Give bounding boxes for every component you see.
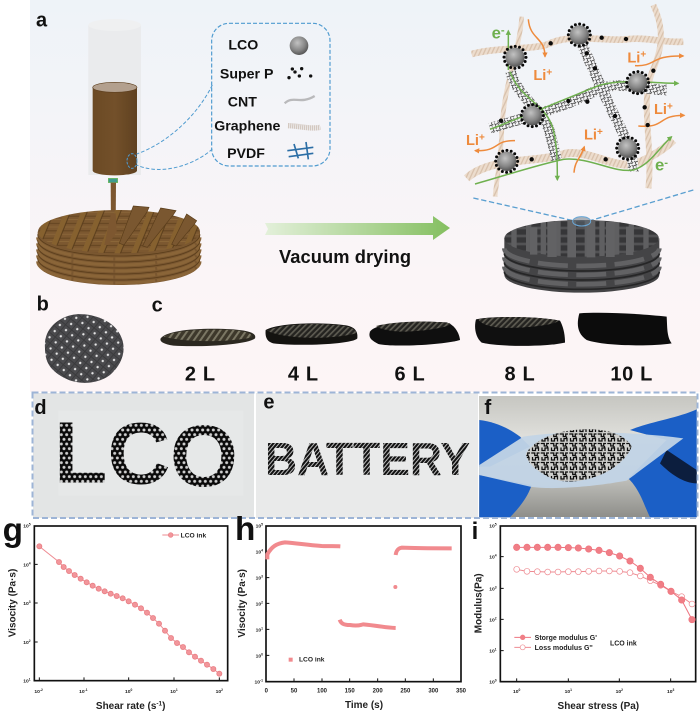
electron and lithium labels: + bbox=[597, 127, 603, 138]
brown printed scaffold bbox=[38, 206, 200, 285]
legend item: CNT bbox=[228, 94, 315, 110]
gloves bbox=[479, 409, 697, 517]
x axis tick labels: 350 bbox=[456, 688, 467, 694]
storage modulus curve bbox=[517, 547, 692, 620]
label 10 L: 10 L bbox=[610, 364, 653, 386]
legend item: CNT: CNT bbox=[228, 94, 257, 110]
y axis tick labels: 3 bbox=[261, 575, 263, 579]
y axis tick labels: 5 bbox=[29, 523, 31, 527]
legend: Storge modulus G' bbox=[535, 635, 597, 642]
y axis title: Modulus(Pa) bbox=[474, 573, 485, 633]
legend: LCO ink bbox=[299, 657, 325, 664]
y axis tick labels: 1 bbox=[261, 626, 263, 630]
x axis tick labels: 250 bbox=[400, 688, 411, 694]
panel letter g: g bbox=[3, 512, 23, 549]
electron and lithium labels: Li bbox=[466, 133, 479, 149]
carbon nanotubes bbox=[490, 43, 667, 172]
printed word LCO bbox=[54, 404, 238, 505]
panel c: thicker disks bbox=[369, 313, 672, 386]
panel letter e: e bbox=[263, 391, 274, 413]
panel letter i: i bbox=[472, 518, 478, 545]
x axis tick labels: 2 bbox=[621, 688, 623, 692]
x axis tick labels bbox=[34, 688, 223, 695]
y axis tick labels: 10 bbox=[489, 555, 495, 561]
chart annotation: LCO ink bbox=[610, 640, 637, 647]
y axis tick labels: 10 bbox=[256, 601, 261, 607]
photo: 4 L disk bbox=[266, 323, 357, 345]
legend item: Super P bbox=[220, 67, 311, 83]
panel a: electrode network illustration bbox=[466, 5, 693, 293]
printed word LCO: L bbox=[54, 404, 107, 502]
label 6 L: 6 L bbox=[395, 364, 425, 386]
legend item: LCO: LCO bbox=[228, 37, 258, 53]
y axis tick labels: 3 bbox=[29, 600, 31, 604]
y axis tick labels: 3 bbox=[495, 585, 497, 589]
x axis tick labels: 0 bbox=[519, 688, 521, 692]
y axis tick labels: 10 bbox=[489, 649, 495, 655]
legend item: LCO bbox=[228, 36, 308, 55]
legend: LCO ink bbox=[181, 532, 206, 539]
panel f: flexible print photo bbox=[479, 396, 697, 517]
legend: Loss modulus G'' bbox=[535, 645, 593, 652]
y axis tick labels: 10 bbox=[489, 680, 495, 686]
y axis tick labels: 10 bbox=[489, 586, 495, 592]
y axis tick labels: 10 bbox=[489, 524, 495, 530]
panel a: printing schematic bbox=[36, 10, 330, 285]
electron and lithium labels: e bbox=[655, 156, 664, 175]
electron and lithium labels: + bbox=[640, 50, 646, 61]
printed pattern bbox=[526, 429, 632, 482]
transparent film bbox=[479, 432, 683, 488]
loss modulus curve bbox=[517, 569, 692, 604]
panel g: viscosity vs shear rate chart bbox=[3, 512, 228, 712]
x axis tick labels: 300 bbox=[428, 688, 439, 694]
photo: top view disk bbox=[45, 314, 124, 383]
y axis title: Visocity (Pa·s) bbox=[7, 569, 18, 637]
x axis tick labels: 10 bbox=[616, 689, 621, 695]
panel letter a: a bbox=[36, 10, 48, 32]
x axis title: Time (s) bbox=[345, 700, 383, 711]
LCO particles bbox=[496, 24, 653, 172]
electron and lithium labels: + bbox=[546, 67, 552, 78]
panel letter f: f bbox=[484, 396, 491, 419]
x axis tick labels: 10 bbox=[513, 689, 519, 695]
panel letter d: d bbox=[34, 397, 47, 419]
y axis tick labels: 0 bbox=[495, 679, 497, 683]
x axis tick labels: 10 bbox=[34, 689, 40, 695]
x axis tick labels: 2 bbox=[221, 688, 223, 692]
zoom callout lines bbox=[473, 190, 693, 221]
legend item: PVDF bbox=[227, 142, 313, 162]
panel letter c: c bbox=[152, 295, 163, 317]
x axis tick labels: 10 bbox=[170, 689, 176, 695]
x axis tick labels: 150 bbox=[345, 688, 355, 694]
printed word BATTERY: BATTERY bbox=[265, 433, 470, 485]
y axis tick labels: 10 bbox=[23, 562, 29, 568]
panel letter h: h bbox=[235, 511, 255, 548]
printed word LCO: C bbox=[107, 405, 170, 503]
photo: 10 L disk bbox=[578, 313, 672, 345]
x axis tick labels: 200 bbox=[373, 688, 383, 694]
x axis tick labels: 10 bbox=[79, 689, 85, 695]
y axis tick labels: 1 bbox=[495, 648, 497, 652]
x axis tick labels bbox=[265, 688, 467, 694]
electron and lithium labels: - bbox=[501, 25, 505, 37]
x axis tick labels: 0 bbox=[265, 688, 269, 694]
y axis tick labels: 10 bbox=[256, 524, 261, 530]
y axis tick labels: 10 bbox=[256, 576, 261, 582]
electron and lithium labels: + bbox=[667, 101, 673, 112]
axes frame bbox=[34, 526, 228, 681]
x axis tick labels: 10 bbox=[565, 689, 570, 695]
legend item: Graphene: Graphene bbox=[214, 119, 280, 135]
label 2 L: 2 L bbox=[185, 364, 216, 386]
panels b and c: printed disks bbox=[37, 294, 357, 386]
x axis tick labels: 100 bbox=[317, 688, 328, 694]
electron and lithium labels: Li bbox=[533, 68, 546, 84]
x axis title: ) bbox=[162, 701, 165, 712]
y axis tick labels: 4 bbox=[495, 554, 497, 558]
axes frame bbox=[266, 526, 461, 682]
panel i: modulus vs shear stress chart bbox=[472, 518, 696, 712]
electron and lithium labels: e bbox=[492, 23, 501, 42]
printing syringe bbox=[88, 19, 141, 228]
callout: ink components legend bbox=[127, 23, 330, 169]
background: upper schematic area bbox=[30, 0, 700, 392]
x axis tick labels: 10 bbox=[216, 689, 221, 695]
x axis tick labels: 1 bbox=[176, 688, 178, 692]
y axis tick labels bbox=[23, 523, 31, 685]
x axis tick labels: 3 bbox=[673, 688, 675, 692]
photo: 6 L disk bbox=[369, 321, 460, 346]
electron and lithium labels: Li bbox=[627, 50, 640, 66]
y axis tick labels bbox=[489, 523, 497, 686]
electron and lithium labels: + bbox=[479, 132, 485, 143]
legend item: Graphene bbox=[214, 119, 320, 135]
legend item: PVDF: PVDF bbox=[227, 146, 265, 162]
x axis tick labels: 10 bbox=[125, 689, 131, 695]
y axis tick labels: 10 bbox=[256, 653, 261, 659]
y axis tick labels: 2 bbox=[29, 639, 31, 643]
electron and lithium labels: Li bbox=[584, 128, 597, 144]
electron and lithium labels: Li bbox=[654, 102, 667, 118]
x axis tick labels: -1 bbox=[85, 688, 88, 692]
electron and lithium labels bbox=[466, 23, 673, 175]
vacuum drying arrow bbox=[265, 216, 450, 267]
x axis tick labels: 0 bbox=[131, 688, 133, 692]
y axis tick labels: 4 bbox=[261, 549, 263, 553]
y axis tick labels: 10 bbox=[256, 550, 261, 556]
photo: 2 L disk bbox=[160, 329, 255, 346]
orange lithium-ion arrows bbox=[475, 19, 684, 173]
legend item: Super P: Super P bbox=[220, 67, 273, 83]
y axis tick labels: 10 bbox=[23, 640, 29, 646]
x axis title: Shear stress (Pa) bbox=[558, 701, 639, 712]
y axis tick labels: 10 bbox=[23, 601, 29, 607]
y axis tick labels bbox=[254, 523, 263, 686]
legend bbox=[162, 532, 206, 539]
y axis tick labels: 10 bbox=[489, 617, 495, 623]
panel h: viscosity vs time chart bbox=[235, 511, 467, 711]
vacuum drying label: Vacuum drying bbox=[279, 246, 411, 267]
x axis tick labels bbox=[513, 688, 675, 695]
x axis tick labels: 10 bbox=[667, 689, 673, 695]
transparent film bbox=[58, 411, 243, 496]
y axis tick labels: 10 bbox=[23, 679, 29, 685]
dashed frame around photos bbox=[32, 392, 698, 518]
y axis tick labels: 4 bbox=[29, 561, 31, 565]
printed word LCO: O bbox=[170, 407, 238, 505]
y axis tick labels: 5 bbox=[261, 523, 263, 527]
viscosity curve bbox=[39, 546, 219, 674]
x axis title: Shear rate (s bbox=[96, 701, 156, 712]
time series segments bbox=[267, 542, 452, 628]
x axis tick labels: -2 bbox=[40, 688, 43, 692]
y axis tick labels: -1 bbox=[260, 679, 263, 683]
y axis tick labels: 10 bbox=[23, 524, 29, 530]
y axis tick labels: 2 bbox=[261, 600, 263, 604]
x axis tick labels: 1 bbox=[570, 688, 572, 692]
y axis tick labels: 1 bbox=[29, 678, 31, 682]
panel d: LCO photo bbox=[33, 393, 254, 518]
label 4 L: 4 L bbox=[288, 364, 319, 386]
y axis tick labels: 2 bbox=[495, 616, 497, 620]
y axis tick labels: 5 bbox=[495, 523, 497, 527]
graphene sheets bbox=[467, 5, 683, 197]
dried grey scaffold bbox=[504, 217, 659, 293]
panel letter b: b bbox=[37, 294, 49, 316]
green electron arrows bbox=[475, 31, 678, 184]
y axis title: Visocity (Pa·s) bbox=[237, 569, 248, 638]
legend bbox=[514, 635, 597, 652]
panel e: BATTERY photo bbox=[256, 391, 478, 518]
label 8 L: 8 L bbox=[505, 364, 535, 386]
axes frame bbox=[500, 526, 696, 682]
x axis tick labels: 50 bbox=[291, 688, 298, 694]
photo: 8 L disk bbox=[475, 317, 565, 346]
electron and lithium labels: - bbox=[664, 157, 668, 169]
y axis tick labels: 10 bbox=[254, 680, 260, 686]
x axis title: -1 bbox=[156, 701, 163, 708]
y axis tick labels: 10 bbox=[256, 627, 261, 633]
y axis tick labels: 0 bbox=[261, 652, 263, 656]
